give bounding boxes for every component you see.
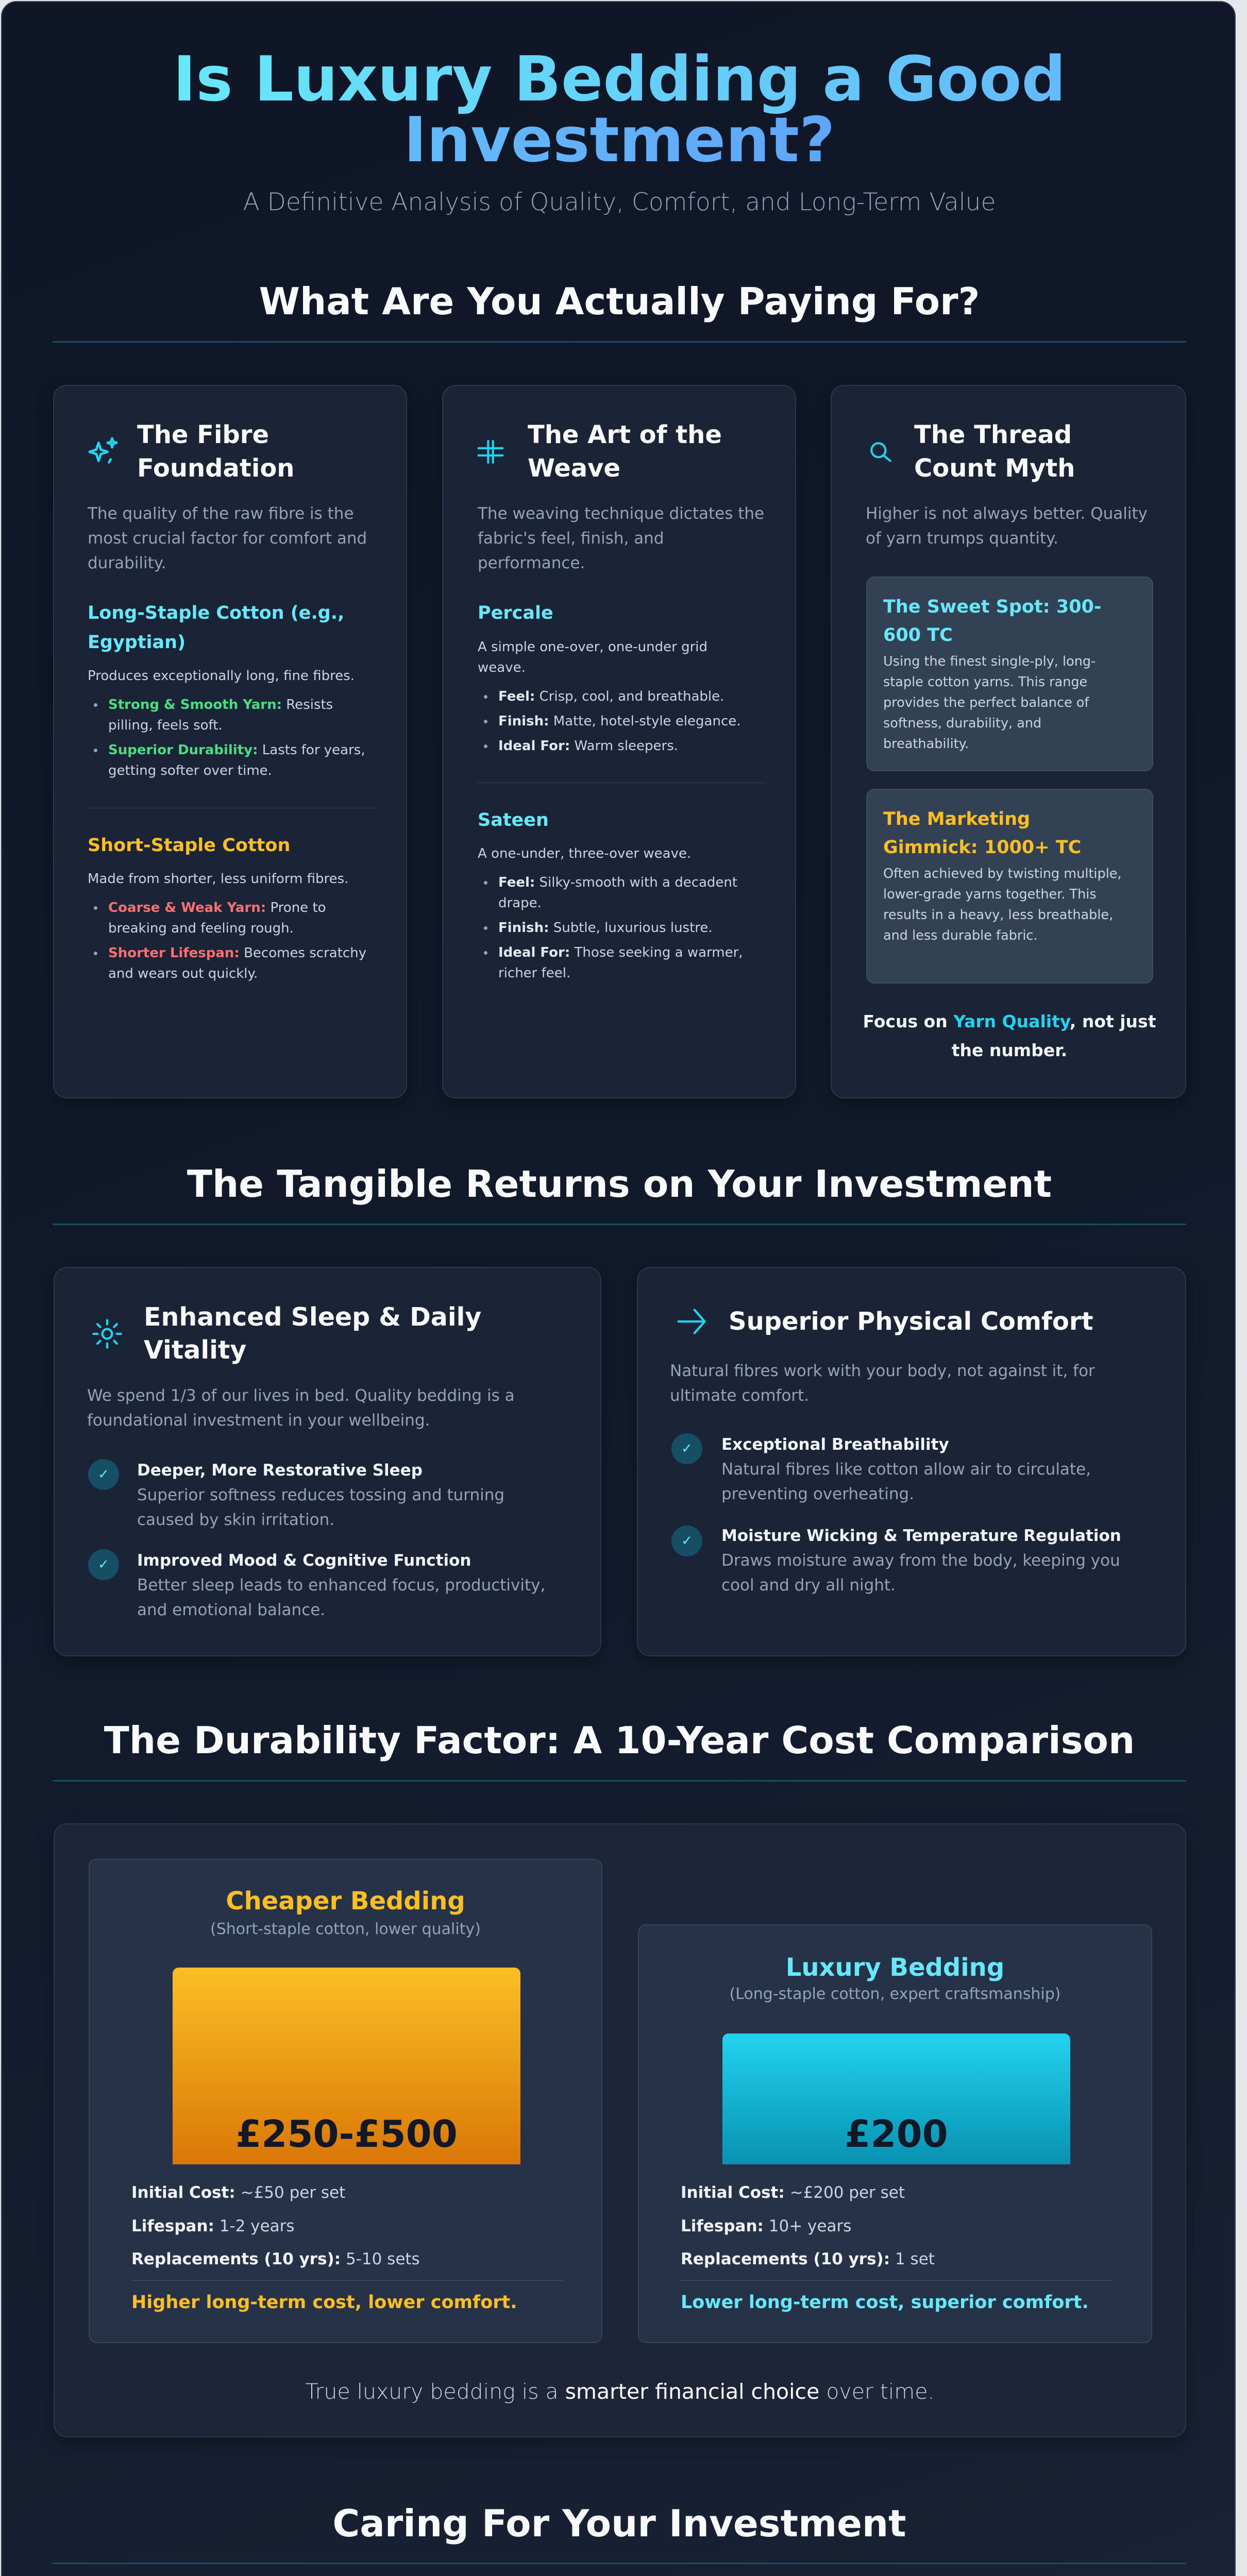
card content: Produces exceptionally long, fine fibres. <box>88 668 355 684</box>
benefit: deeper sleep: ✓ <box>98 1467 109 1482</box>
title: Investment? <box>403 105 835 176</box>
card title <box>528 420 722 483</box>
card title: Enhanced Sleep & Daily <box>144 1302 481 1332</box>
panel: art of the weave <box>442 385 796 1098</box>
card content: Short-Staple Cotton <box>88 835 290 856</box>
card content: A one-under, three-over weave. <box>478 846 691 861</box>
card description: Higher is not always better. Quality of yarn trumps quantity. <box>866 504 1148 548</box>
panel: physical comfort <box>637 1267 1186 1656</box>
benefit: breathability: ✓ <box>681 1441 693 1456</box>
card content <box>88 504 379 981</box>
card title: Vitality <box>144 1335 246 1365</box>
card content: Percale <box>478 603 553 623</box>
card title: Count Myth <box>914 454 1075 483</box>
benefit: moisture wicking: Draws moisture away from the body, keeping you cool and dry all night. <box>721 1551 1120 1595</box>
card title: Weave <box>528 454 620 483</box>
comparison: luxury bedding: Luxury Bedding <box>786 1953 1004 1982</box>
bar: cheaper cost: £250-£500 <box>235 2112 458 2156</box>
card content: Feel: Crisp, cool, and breathable. <box>498 689 724 704</box>
benefit: mood: Better sleep leads to enhanced focus, productivity, and emotional balance. <box>137 1576 545 1619</box>
card content: Ideal For: Warm sleepers. <box>498 738 678 754</box>
comparison: cheaper bedding: Lifespan: 1-2 years <box>131 2217 295 2235</box>
heading: durability factor: The Durability Factor: A 10-Year Cost Comparison <box>104 1719 1135 1762</box>
card description: Natural fibres work with your body, not against it, for ultimate comfort. <box>670 1362 1095 1405</box>
card content: The quality of the raw fibre is the most crucial factor for comfort and durability. <box>88 504 367 572</box>
card description: We spend 1/3 of our lives in bed. Quality bedding is a foundational investment in your wellbeing. <box>87 1386 515 1430</box>
benefit: moisture wicking <box>671 1526 1121 1595</box>
comparison: cheaper bedding: Replacements (10 yrs): 5-10 sets <box>131 2250 420 2268</box>
comparison: cheaper bedding: Higher long-term cost, lower comfort. <box>131 2292 517 2313</box>
card content: Ideal For: Those seeking a warmer, richer feel. <box>498 945 743 981</box>
benefit: breathability <box>671 1433 1091 1503</box>
comparison: cheaper bedding: (Short-staple cotton, lower quality) <box>210 1920 481 1938</box>
panel: cost comparison <box>54 1823 1186 2437</box>
comparison: luxury bedding <box>638 1924 1152 2343</box>
card title: The Art of the <box>528 420 722 449</box>
benefit: moisture wicking: Moisture Wicking & Temperature Regulation <box>721 1527 1121 1545</box>
callout: marketing gimmick: The Marketing Gimmick: 1000+ TC <box>883 809 1081 858</box>
icon: search <box>870 442 891 462</box>
card title: The Fibre <box>137 420 269 449</box>
card title: Foundation <box>137 454 294 483</box>
benefit: deeper sleep: Superior softness reduces tossing and turning caused by skin irritation. <box>137 1486 504 1529</box>
heading: tangible returns: The Tangible Returns on Your Investment <box>187 1162 1052 1206</box>
card title <box>137 420 294 483</box>
takeaway: Focus on Yarn Quality, not just the number. <box>863 1011 1156 1060</box>
bar: luxury cost <box>722 2033 1070 2164</box>
benefit: mood: Improved Mood & Cognitive Function <box>137 1551 471 1570</box>
card content: The weaving technique dictates the fabric's feel, finish, and performance. <box>478 504 764 572</box>
callout: marketing gimmick <box>866 789 1153 984</box>
comparison: cheaper bedding <box>89 1859 602 2343</box>
panel: thread count myth <box>831 385 1186 1098</box>
bar: cheaper cost <box>173 1968 520 2164</box>
heading: what are you paying for: What Are You Actually Paying For? <box>259 280 980 323</box>
comparison: luxury bedding: Lower long-term cost, superior comfort. <box>681 2292 1089 2313</box>
benefit: breathability: Natural fibres like cotton allow air to circulate, preventing overheating. <box>721 1460 1091 1503</box>
icon: sun <box>92 1319 122 1349</box>
card title <box>144 1302 481 1365</box>
icon: hash <box>477 440 504 464</box>
card content: Strong & Smooth Yarn: Resists pilling, feels soft. <box>108 697 333 733</box>
benefit: moisture wicking: ✓ <box>681 1533 693 1549</box>
callout: marketing gimmick: Often achieved by twisting multiple, lower-grade yarns together. This results in a heavy, less breathable, and less durable fabric. <box>883 866 1122 943</box>
card content: Finish: Subtle, luxurious lustre. <box>498 920 713 936</box>
callout: sweet spot: The Sweet Spot: 300-600 TC <box>883 597 1101 646</box>
card title <box>914 420 1075 483</box>
comparison: luxury bedding: Lifespan: 10+ years <box>681 2217 851 2235</box>
callout: sweet spot <box>866 577 1153 771</box>
icon: sparkles <box>88 437 118 464</box>
card content: Superior Durability: Lasts for years, getting softer over time. <box>108 742 365 778</box>
benefit: mood: ✓ <box>98 1557 109 1572</box>
benefit: breathability: Exceptional Breathability <box>721 1435 949 1454</box>
panel: fibre foundation <box>53 385 407 1098</box>
card content: Feel: Silky-smooth with a decadent drape. <box>498 875 737 911</box>
card content: Made from shorter, less uniform fibres. <box>88 871 348 887</box>
title <box>173 44 1066 176</box>
panel: enhanced sleep <box>54 1267 601 1656</box>
comparison: cheaper bedding: Cheaper Bedding <box>226 1887 465 1916</box>
card title: Superior Physical Comfort <box>729 1307 1093 1336</box>
card content: Shorter Lifespan: Becomes scratchy and wears out quickly. <box>108 945 366 981</box>
comparison: luxury bedding: (Long-staple cotton, expert craftsmanship) <box>730 1985 1060 2003</box>
card content <box>477 504 766 981</box>
comparison: cheaper bedding: Initial Cost: ~£50 per set <box>131 2183 345 2202</box>
card content: Long-Staple Cotton (e.g., Egyptian) <box>88 603 344 653</box>
conclusion: True luxury bedding is a smarter financial choice over time. <box>305 2379 934 2404</box>
comparison: luxury bedding: Replacements (10 yrs): 1 set <box>681 2250 935 2268</box>
benefit: mood <box>88 1549 545 1619</box>
callout: sweet spot: Using the finest single-ply, long-staple cotton yarns. This range provides the perfect balance of softness, durability, and breathability. <box>883 654 1096 752</box>
card content: Finish: Matte, hotel-style elegance. <box>498 714 741 729</box>
title: Is Luxury Bedding a Good <box>173 44 1066 115</box>
card content: Coarse & Weak Yarn: Prone to breaking and feeling rough. <box>108 900 326 936</box>
bar: luxury cost: £200 <box>845 2112 948 2156</box>
icon: arrow right <box>677 1309 706 1334</box>
benefit: deeper sleep: Deeper, More Restorative Sleep <box>137 1461 423 1480</box>
card content: Sateen <box>478 810 549 831</box>
heading: caring: Caring For Your Investment <box>332 2502 906 2545</box>
card title: The Thread <box>914 420 1072 449</box>
comparison: luxury bedding: Initial Cost: ~£200 per set <box>681 2183 905 2202</box>
benefit: deeper sleep <box>88 1459 504 1529</box>
card content: A simple one-over, one-under grid weave. <box>478 639 707 675</box>
subtitle: A Definitive Analysis of Quality, Comfort, and Long-Term Value <box>243 188 996 216</box>
